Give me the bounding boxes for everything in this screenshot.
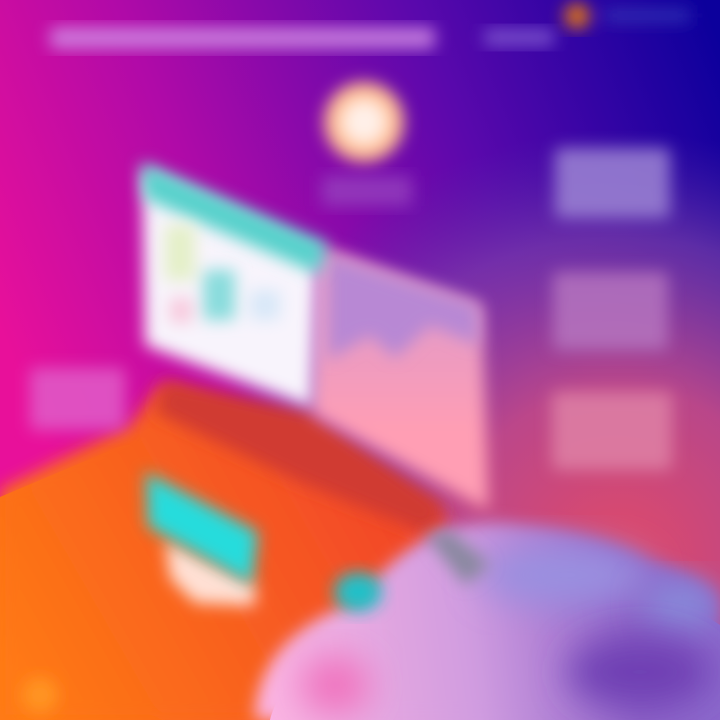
right text block 2 bbox=[553, 272, 668, 350]
teal device screen bbox=[146, 472, 258, 585]
sun caption bbox=[322, 176, 412, 206]
grey stylus bbox=[425, 530, 490, 585]
right text block 1 bbox=[555, 148, 670, 218]
orange glow bottom left bbox=[22, 677, 58, 713]
device stand bbox=[165, 540, 255, 606]
purple cloud bbox=[255, 523, 720, 720]
cloud blue highlight bbox=[480, 545, 650, 605]
pink cloud highlight bbox=[301, 657, 369, 713]
dashboard panel: chart area bbox=[312, 245, 488, 510]
cloud dark shade bbox=[568, 636, 712, 708]
dashboard panel: white table bbox=[142, 168, 318, 408]
left text block bbox=[30, 368, 125, 430]
right text block 3 bbox=[552, 392, 672, 470]
orange floor bbox=[0, 385, 450, 720]
monitor base strip bbox=[155, 380, 445, 535]
top navigation text bbox=[484, 29, 554, 46]
top right badge bbox=[564, 3, 690, 29]
cloud right highlight bbox=[645, 583, 715, 627]
title bbox=[50, 27, 435, 49]
table coloured cells bbox=[165, 225, 280, 323]
dashboard teal header bbox=[142, 162, 328, 274]
teal droplet bbox=[334, 572, 382, 612]
chart peaks bbox=[328, 255, 478, 360]
sun icon bbox=[324, 82, 404, 162]
